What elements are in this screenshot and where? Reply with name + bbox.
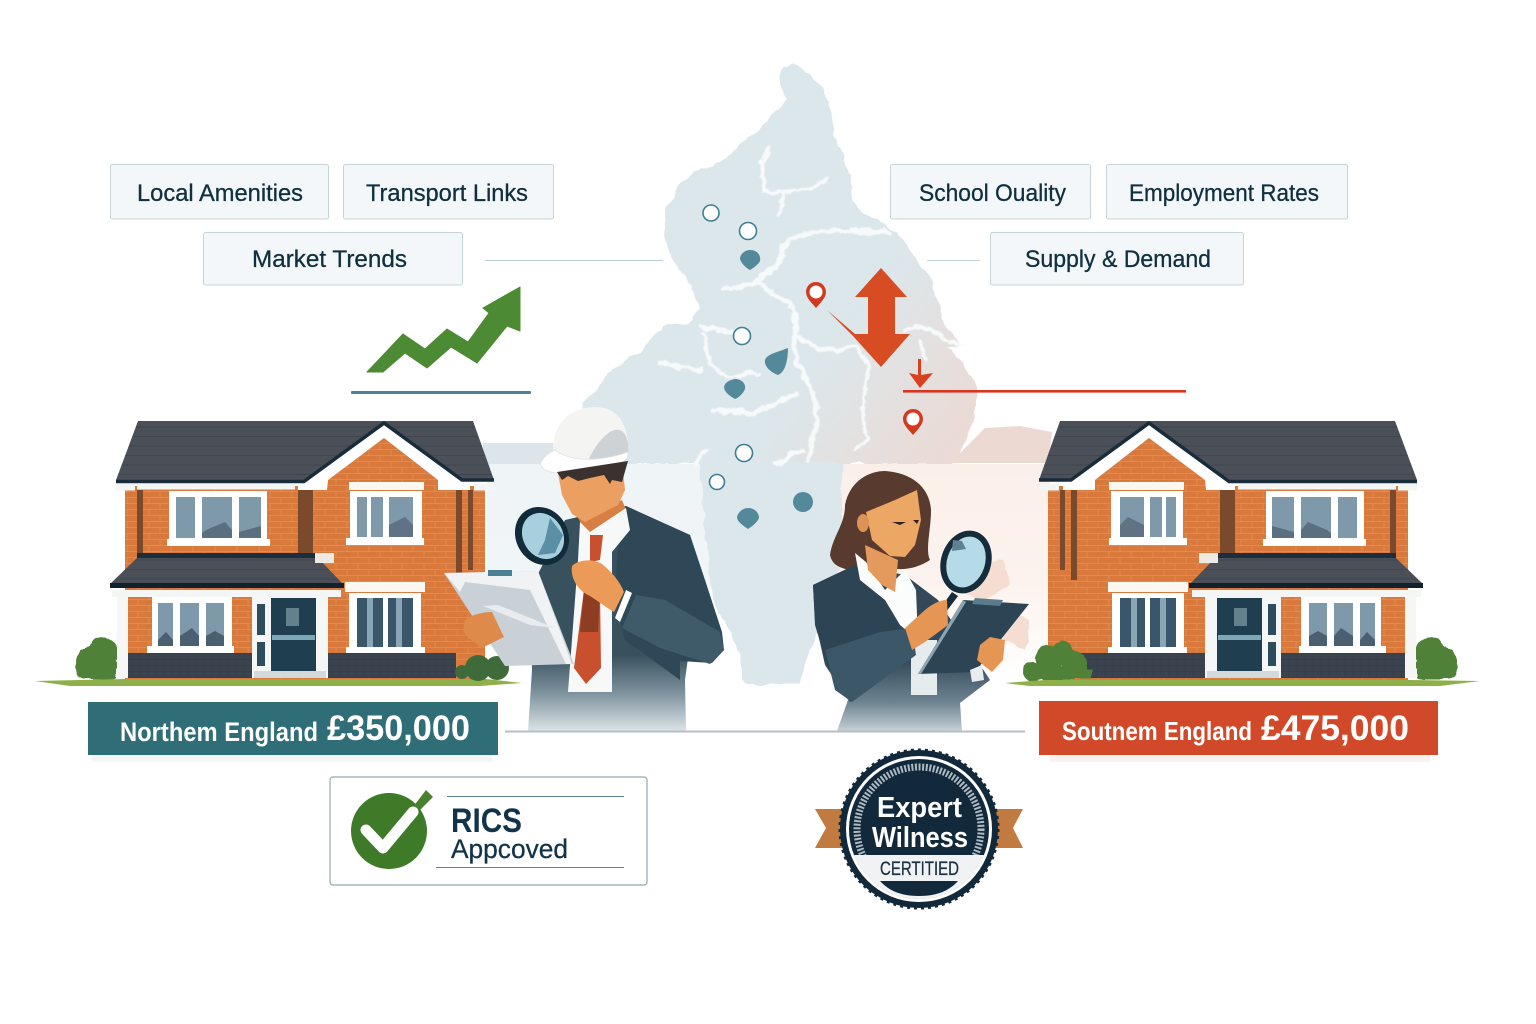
price bar: Southern England: £475,000 — [1261, 709, 1409, 748]
lower left window — [147, 597, 234, 653]
cuff — [970, 665, 984, 682]
badge: RICS Approved: RICS — [451, 802, 522, 840]
tag: Employment Rates — [1106, 164, 1348, 219]
badge: RICS Approved — [330, 777, 647, 885]
tag: Local Amenities — [110, 164, 328, 219]
red pin south — [903, 409, 923, 435]
connector line left — [485, 260, 663, 261]
sleeve — [622, 595, 724, 664]
house: southern — [1022, 421, 1459, 682]
tag: Supply and Demand: Supply & Demand — [1025, 246, 1211, 273]
bush front left — [1022, 642, 1093, 682]
badge: Expert Witness Certified — [815, 750, 1023, 908]
price bar: Northern England — [88, 702, 498, 762]
bush behind surveyor — [455, 655, 509, 681]
white markers — [703, 205, 756, 490]
icon: green rising arrow — [367, 287, 520, 372]
pink band southern side — [838, 464, 1050, 682]
tablet — [918, 598, 1029, 674]
icon: red double arrow — [827, 268, 910, 367]
map markers — [703, 205, 923, 529]
face — [558, 462, 625, 522]
house: northern — [74, 421, 494, 680]
hand holding tablet — [977, 637, 1005, 672]
ground floor base — [128, 653, 456, 678]
bush — [74, 637, 118, 679]
magnifying glass — [932, 524, 1000, 612]
price bar: Southern England — [1039, 701, 1438, 762]
lower right window — [345, 582, 425, 653]
person: female surveyor — [813, 471, 1029, 731]
eave line — [116, 423, 494, 482]
price bar: Northern England: £350,000 — [327, 709, 470, 748]
pale band behind surveyor — [487, 464, 712, 599]
hand on clipboard — [463, 612, 504, 648]
wall shadows and pipes — [137, 490, 473, 580]
icon: green check — [351, 790, 433, 869]
lanyard card — [911, 640, 937, 695]
necktie — [574, 535, 603, 684]
upper left window — [167, 491, 270, 546]
brick wall — [125, 486, 485, 680]
southern map blush — [950, 426, 1052, 463]
hand holding glass — [905, 600, 948, 650]
price bar: Northern England: Northem England — [120, 717, 318, 747]
fascia — [116, 484, 494, 490]
badge: Expert Witness Certified: Wilness — [872, 822, 968, 854]
tag: School Quality: School Ouality — [919, 180, 1066, 207]
map of England — [483, 63, 1052, 684]
hand at tie — [572, 560, 624, 612]
connector line right — [927, 260, 980, 261]
porch pillar — [117, 597, 128, 678]
gable trim — [298, 425, 470, 490]
icon: small down arrow — [909, 359, 933, 388]
jacket — [813, 565, 990, 731]
neck — [578, 500, 626, 535]
map band left — [483, 443, 600, 464]
teal markers — [724, 250, 813, 529]
tag: School Quality — [890, 164, 1090, 219]
lower map section — [700, 462, 843, 684]
tag: Transport Links — [344, 164, 554, 219]
upper right window — [346, 482, 424, 545]
clipboard — [444, 570, 574, 666]
shirt — [568, 508, 630, 692]
red divider line — [903, 390, 1186, 393]
lawn south — [1005, 680, 1480, 686]
lawn north — [35, 679, 522, 686]
main roof — [116, 421, 494, 480]
trend baseline — [351, 391, 531, 394]
person: male surveyor — [444, 407, 724, 731]
ground line — [505, 730, 1025, 732]
tag: Supply and Demand — [990, 232, 1244, 285]
hair — [830, 471, 931, 570]
tag: Employment Rates: Employment Rates — [1129, 180, 1319, 207]
gable brick — [327, 438, 438, 492]
hair — [557, 461, 628, 484]
badge: Expert Witness Certified: Expert — [877, 792, 962, 824]
suit body — [528, 506, 700, 731]
shirt cuff — [615, 590, 632, 622]
ribbon — [815, 809, 1023, 848]
certified strip — [854, 855, 984, 899]
shirt and collar — [855, 553, 918, 640]
hard hat — [541, 407, 628, 473]
price bar: Southern England: Soutnem England — [1062, 716, 1252, 746]
map region borders — [660, 148, 963, 464]
front door — [252, 597, 328, 678]
badge: RICS Approved: Appcoved — [451, 834, 568, 864]
neck and face — [857, 490, 921, 592]
tag: Local Amenities: Local Amenities — [137, 180, 303, 207]
tag: Market Trends: Market Trends — [252, 246, 407, 273]
magnifying glass — [504, 497, 580, 575]
sleeve — [825, 628, 916, 702]
porch roof — [110, 553, 344, 597]
red pin north — [806, 282, 826, 308]
tag: Market Trends — [204, 232, 462, 285]
badge: Expert Witness Certified: CERTITIED — [880, 859, 959, 880]
tag: Transport Links: Transport Links — [366, 180, 528, 207]
